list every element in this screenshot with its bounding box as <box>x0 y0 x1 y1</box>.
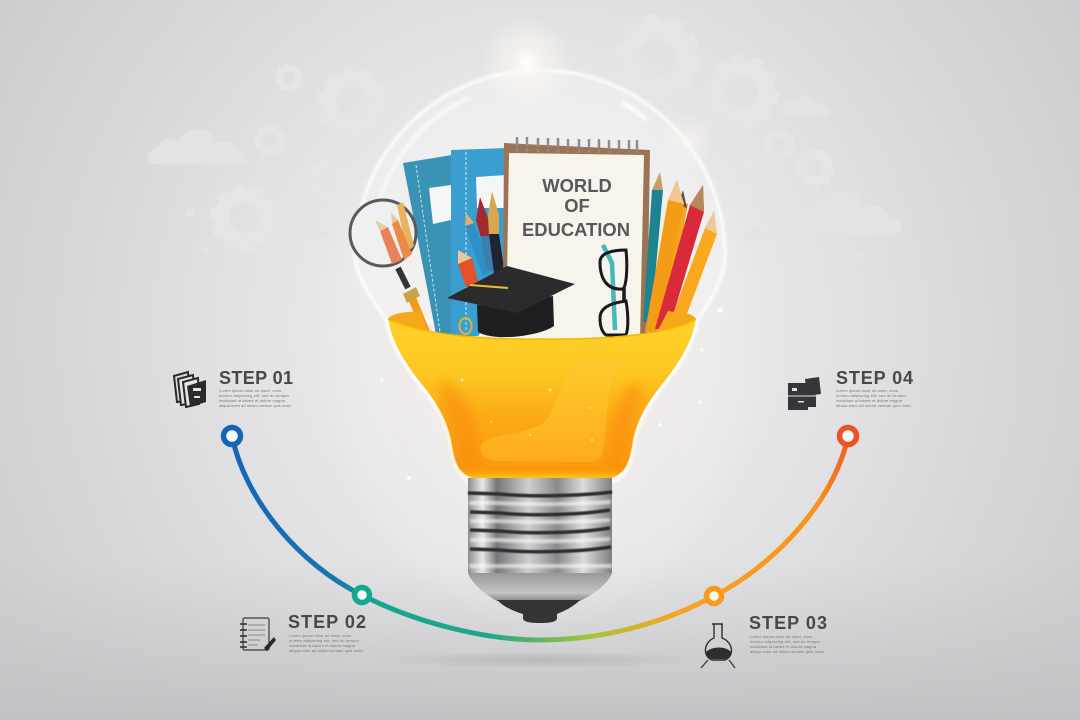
sun glow <box>482 17 572 107</box>
body text: Lorem ipsum dolor sit amet, cons <box>836 388 898 393</box>
body text <box>289 633 364 653</box>
body text <box>750 634 825 654</box>
icon: notebook and pen <box>240 618 276 651</box>
heading: STEP 04 <box>836 368 913 388</box>
node: step 04 <box>840 428 856 444</box>
icon: flask <box>701 624 735 668</box>
body text <box>219 388 292 408</box>
flare on glass <box>664 114 716 166</box>
notebook <box>497 137 650 340</box>
step 04 block <box>788 368 913 410</box>
icon: puzzle <box>788 377 821 410</box>
body text: ectetur adipiscing elit, sed do tempor <box>836 393 907 398</box>
funnel front rim line <box>388 319 696 339</box>
body text: aliqua enim ad minim veniam quis nostr <box>836 403 912 408</box>
step 03 block <box>701 613 827 668</box>
icon: books <box>174 372 206 407</box>
background gears and clouds <box>148 18 902 259</box>
heading: STEP 01 <box>219 368 293 388</box>
magnifying glass <box>350 200 426 332</box>
body text: Lorem ipsum dolor sit amet, cons <box>750 634 812 639</box>
body text: aliqua enim ad minim veniam quis nostr <box>289 648 364 653</box>
graduation cap <box>447 266 575 337</box>
spiral binding <box>517 137 637 153</box>
body text: Lorem ipsum dolor sit amet, cons <box>289 633 351 638</box>
node: step 02 <box>354 588 370 602</box>
bulb halo <box>310 50 770 630</box>
funnel back rim <box>388 311 696 334</box>
book: right <box>451 148 507 336</box>
notebook title: EDUCATION <box>522 219 630 240</box>
body text: ectetur adipiscing elit, sed do tempor <box>750 639 821 644</box>
curved timeline <box>232 436 848 640</box>
body text: incididunt ut labore et dolore magna <box>750 644 817 649</box>
body text <box>836 388 912 408</box>
lightbulb funnel <box>388 311 696 480</box>
node: step 01 <box>224 428 240 444</box>
body text: incididunt ut labore et dolore magna <box>836 398 903 403</box>
funnel white outline <box>388 319 696 480</box>
glasses <box>600 245 628 335</box>
taper collar <box>468 573 612 601</box>
funnel body <box>388 319 696 478</box>
pencils right <box>643 172 717 332</box>
body text: aliqua enim ad minim veniam quis nostr <box>219 403 292 408</box>
heading: STEP 03 <box>749 613 827 633</box>
node: step 03 <box>706 588 722 604</box>
body text: aliqua enim ad minim veniam quis nostr <box>750 649 825 654</box>
sparkles around funnel <box>380 307 723 480</box>
step 01 block <box>174 368 293 408</box>
notebook title <box>522 175 630 240</box>
step 02 block <box>240 612 366 653</box>
floor shadow <box>370 651 710 669</box>
book: left <box>403 155 452 336</box>
dark contact <box>497 600 580 623</box>
notebook title: WORLD <box>542 175 612 196</box>
sparks <box>460 378 593 441</box>
lightbulb screw base <box>468 478 612 623</box>
body text: Lorem ipsum dolor sit amet, cons <box>219 388 281 393</box>
funnel inner panel <box>481 357 623 462</box>
body text: incididunt ut labore et dolore magna <box>219 398 286 403</box>
pens in front of book <box>458 191 504 334</box>
body text: incididunt ut labore et dolore magna <box>289 643 356 648</box>
notebook title: OF <box>564 195 590 216</box>
screw threads <box>468 492 612 552</box>
funnel side shading <box>440 378 644 472</box>
body text: ectetur adipiscing elit, sed do tempor <box>219 393 290 398</box>
body text: ectetur adipiscing elit, sed do tempor <box>289 638 360 643</box>
heading: STEP 02 <box>288 612 366 632</box>
bulb glass <box>355 70 725 322</box>
